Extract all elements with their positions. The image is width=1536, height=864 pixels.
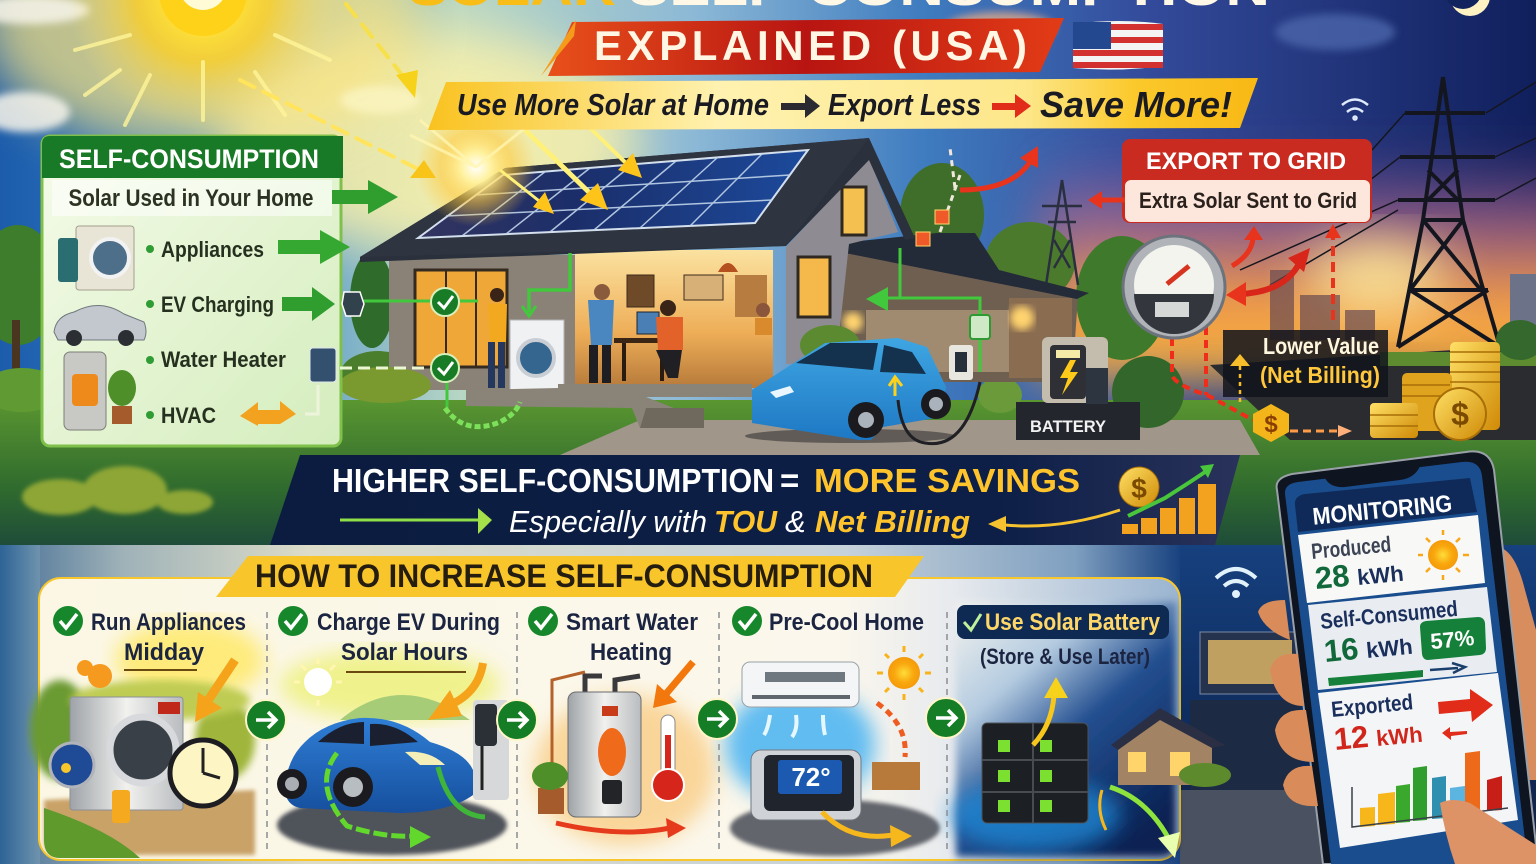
arrow: step 2 xyxy=(497,700,537,740)
icon: savings chart: $ xyxy=(1131,473,1147,504)
icon: orange sun cloud xyxy=(77,660,112,688)
icon: sun xyxy=(294,658,342,706)
sky background xyxy=(0,0,1536,440)
arrow: yellow left xyxy=(988,510,1120,532)
arrow: dashed ray 2 xyxy=(240,80,436,178)
icon: dollar hexagon: $ xyxy=(1264,411,1278,438)
arrow: green right xyxy=(340,508,492,534)
pill: use solar battery xyxy=(957,605,1169,639)
card: smart water heating xyxy=(528,606,715,845)
header: monitoring: MONITORING xyxy=(1311,490,1453,531)
right windows xyxy=(798,257,830,317)
small pylon xyxy=(1042,180,1082,285)
card: smart water heating: Heating xyxy=(590,639,672,666)
icon: blue car xyxy=(277,718,473,813)
roof xyxy=(360,138,915,262)
card: pre-cool home: Pre-Cool Home xyxy=(769,609,924,636)
driveway xyxy=(560,420,1260,455)
panel heading: self-consumption: SELF-CONSUMPTION xyxy=(59,144,319,174)
icon: ev charging glyph xyxy=(342,292,364,316)
icon: thermostat xyxy=(751,750,861,820)
list item: ev charging: EV Charging xyxy=(161,292,274,317)
arrow: export red xyxy=(1438,689,1493,722)
icon: check xyxy=(528,606,558,636)
hand behind phone xyxy=(1498,547,1536,780)
large pylon xyxy=(1240,77,1536,347)
trees left xyxy=(0,225,416,515)
finger: left 3 xyxy=(1283,766,1318,806)
meter gauge xyxy=(1123,236,1225,338)
arrow: to export less xyxy=(781,94,820,118)
arrow: orange down xyxy=(428,663,483,720)
card: produced xyxy=(1298,515,1485,603)
arrow: green path xyxy=(1100,787,1180,858)
bar chart xyxy=(1352,751,1508,827)
icon: washer xyxy=(70,697,183,810)
card: produced: Produced xyxy=(1310,531,1392,564)
panel heading: self-consumption xyxy=(42,136,343,178)
icon: sun with rays xyxy=(68,0,338,130)
city skyline xyxy=(1270,270,1375,340)
card: produced: kWh xyxy=(1356,561,1405,590)
icon: sun xyxy=(1418,530,1469,580)
open room xyxy=(575,250,773,388)
arrow: red under heater xyxy=(556,818,686,838)
clouds xyxy=(0,0,1395,132)
phone: monitoring xyxy=(1277,451,1536,864)
list item: hvac: HVAC xyxy=(161,403,216,428)
panel: self-consumption xyxy=(42,136,343,446)
icon: american flag xyxy=(1073,21,1163,70)
icon: check xyxy=(53,606,83,636)
icon: savings chart xyxy=(1119,464,1216,534)
subheading: extra solar sent to grid xyxy=(1125,180,1370,222)
heading: export to grid: EXPORT TO GRID xyxy=(1146,148,1346,175)
card: exported: kWh xyxy=(1375,722,1424,751)
arrow: solar ray 5 xyxy=(500,170,554,214)
icon: thermostat: 72° xyxy=(791,762,831,792)
arrow: yellow up xyxy=(1033,677,1068,745)
card: run appliances midday: Midday xyxy=(124,639,205,666)
panel: export to grid xyxy=(1122,139,1372,223)
banner: higher self-consumption: & xyxy=(785,504,806,539)
card: self-consumed: Self-Consumed xyxy=(1319,596,1459,634)
step dividers xyxy=(267,612,947,850)
card: exported xyxy=(1318,673,1518,848)
card: produced: 28 xyxy=(1313,558,1351,596)
card: self-consumed: kWh xyxy=(1365,634,1414,663)
arrow: yellow xyxy=(822,812,912,847)
porch and steps xyxy=(466,384,752,428)
callout: lower value xyxy=(1223,330,1388,402)
icon: check xyxy=(278,606,308,636)
solar panels xyxy=(418,150,808,238)
arrow: orange down xyxy=(195,660,235,722)
card: exported: Exported xyxy=(1330,689,1414,722)
arrows: step connectors xyxy=(246,698,966,740)
roof sun flare and rays xyxy=(240,4,642,227)
banner: use more solar: Save More! xyxy=(1040,84,1232,125)
icon: check xyxy=(732,606,762,636)
banner: higher self-consumption: Net Billing xyxy=(815,504,970,539)
finger: left 1 xyxy=(1270,654,1304,706)
hand holding phone xyxy=(1258,600,1536,864)
icon: wifi bottom xyxy=(1216,569,1256,596)
finger: left 2 xyxy=(1275,710,1314,762)
heading: how to increase self-consumption: HOW TO INCREASE SELF-CONSUMPTION xyxy=(255,558,873,594)
arrow: step 4 xyxy=(926,698,966,738)
right scene background xyxy=(1180,545,1536,864)
list item: water heater: Water Heater xyxy=(161,347,286,372)
card: self-consumed: 57% xyxy=(1429,625,1475,654)
icon: green check badge xyxy=(431,288,459,316)
list item: appliances xyxy=(58,226,264,290)
banner: use more solar: Use More Solar at Home xyxy=(457,87,769,122)
card: charge ev: Charge EV During xyxy=(317,609,500,636)
arrow: green cable xyxy=(327,753,485,848)
arrow: solar ray 4 xyxy=(590,128,642,178)
card: self-consumed: 16 xyxy=(1322,631,1360,669)
ev charger xyxy=(949,315,990,380)
icon: small house xyxy=(1111,708,1231,787)
icon: coin stacks: $ xyxy=(1451,396,1469,432)
battery: BATTERY xyxy=(1030,417,1107,436)
icon: charger xyxy=(473,700,509,800)
subheading: solar used in your home xyxy=(52,180,332,216)
banner: explained (usa): EXPLAINED (USA) xyxy=(594,22,1030,69)
arrow: solar ray 3 xyxy=(525,130,608,210)
right road xyxy=(1210,345,1536,440)
card: self-consumed xyxy=(1308,587,1497,690)
banner: higher self-consumption: HIGHER SELF-CONSUMPTION xyxy=(332,462,774,499)
list item: ev charging xyxy=(54,292,274,346)
icon: moon xyxy=(1444,0,1490,16)
icon: sun xyxy=(877,646,931,700)
background trees behind house xyxy=(900,163,1184,428)
banner: use more solar: Export Less xyxy=(828,87,981,122)
house illustration xyxy=(339,138,1089,428)
card: run appliances midday xyxy=(30,606,265,858)
arrows: self-consumption flows xyxy=(240,180,980,427)
arrow: step 3 xyxy=(697,699,737,739)
banner: higher self-consumption: = xyxy=(780,462,799,499)
banner: higher self-consumption: TOU xyxy=(714,504,779,539)
panel: how to increase xyxy=(30,556,1231,860)
card: run appliances midday: Run Appliances xyxy=(91,609,246,636)
icon: dollar hexagon xyxy=(1253,404,1289,442)
banner: explained (usa) xyxy=(541,18,1064,76)
arrow: dashed ray 1 xyxy=(346,4,418,98)
icon: dial xyxy=(50,743,94,787)
people xyxy=(488,284,772,388)
main wall xyxy=(389,255,575,390)
banner: higher self-consumption: MORE SAVINGS xyxy=(814,462,1080,499)
washing machine xyxy=(510,320,564,390)
icon: air conditioner xyxy=(742,662,859,707)
subheading: extra solar sent to grid: Extra Solar Sent to Grid xyxy=(1139,188,1357,213)
icon: coin stacks xyxy=(1370,342,1500,440)
title xyxy=(408,0,1270,16)
pill: use solar battery: Use Solar Battery xyxy=(985,609,1161,636)
bottom background xyxy=(0,545,1536,864)
banner: higher self-consumption xyxy=(270,455,1240,545)
icon: green check badge xyxy=(431,354,459,382)
left edge background xyxy=(0,545,40,864)
gable wall xyxy=(786,158,898,364)
icon: thermometer xyxy=(652,715,684,801)
icon: clock xyxy=(170,740,236,806)
icon: water heater xyxy=(552,672,641,817)
card: charge ev: Solar Hours xyxy=(341,639,468,666)
header: monitoring xyxy=(1295,478,1477,532)
battery xyxy=(1016,337,1140,440)
icon: battery stack xyxy=(982,723,1088,823)
subheading: solar used in your home: Solar Used in Your Home xyxy=(68,185,314,212)
arrow: step 1 xyxy=(246,700,286,740)
card: exported: 12 xyxy=(1332,719,1370,757)
banner: use more solar xyxy=(428,78,1258,130)
icon: plant xyxy=(532,762,568,814)
callout: lower value: (Net Billing) xyxy=(1260,362,1380,388)
list item: appliances: Appliances xyxy=(161,237,264,262)
list item: water heater xyxy=(64,347,286,430)
icon: wifi top right xyxy=(1342,100,1368,120)
card: pre-cool home xyxy=(725,606,940,856)
thumb: left xyxy=(1258,600,1290,640)
garage wing xyxy=(840,250,1078,382)
lawn background xyxy=(0,400,1536,550)
card: use solar battery: (Store & Use Later) xyxy=(980,644,1150,669)
banner: higher self-consumption: Especially with xyxy=(509,504,707,539)
arrows: export flows xyxy=(916,146,1352,437)
arrow: to save more xyxy=(992,94,1031,118)
arrow: orange down xyxy=(653,662,693,708)
card: charge ev xyxy=(277,606,509,855)
left window xyxy=(415,270,507,367)
card: smart water heating: Smart Water xyxy=(566,609,698,636)
callout: lower value: Lower Value xyxy=(1263,333,1379,359)
ev car centre xyxy=(745,338,980,444)
finger: pointing xyxy=(1440,800,1536,864)
arrow: small red xyxy=(1442,727,1467,740)
card: use solar battery xyxy=(950,602,1231,858)
